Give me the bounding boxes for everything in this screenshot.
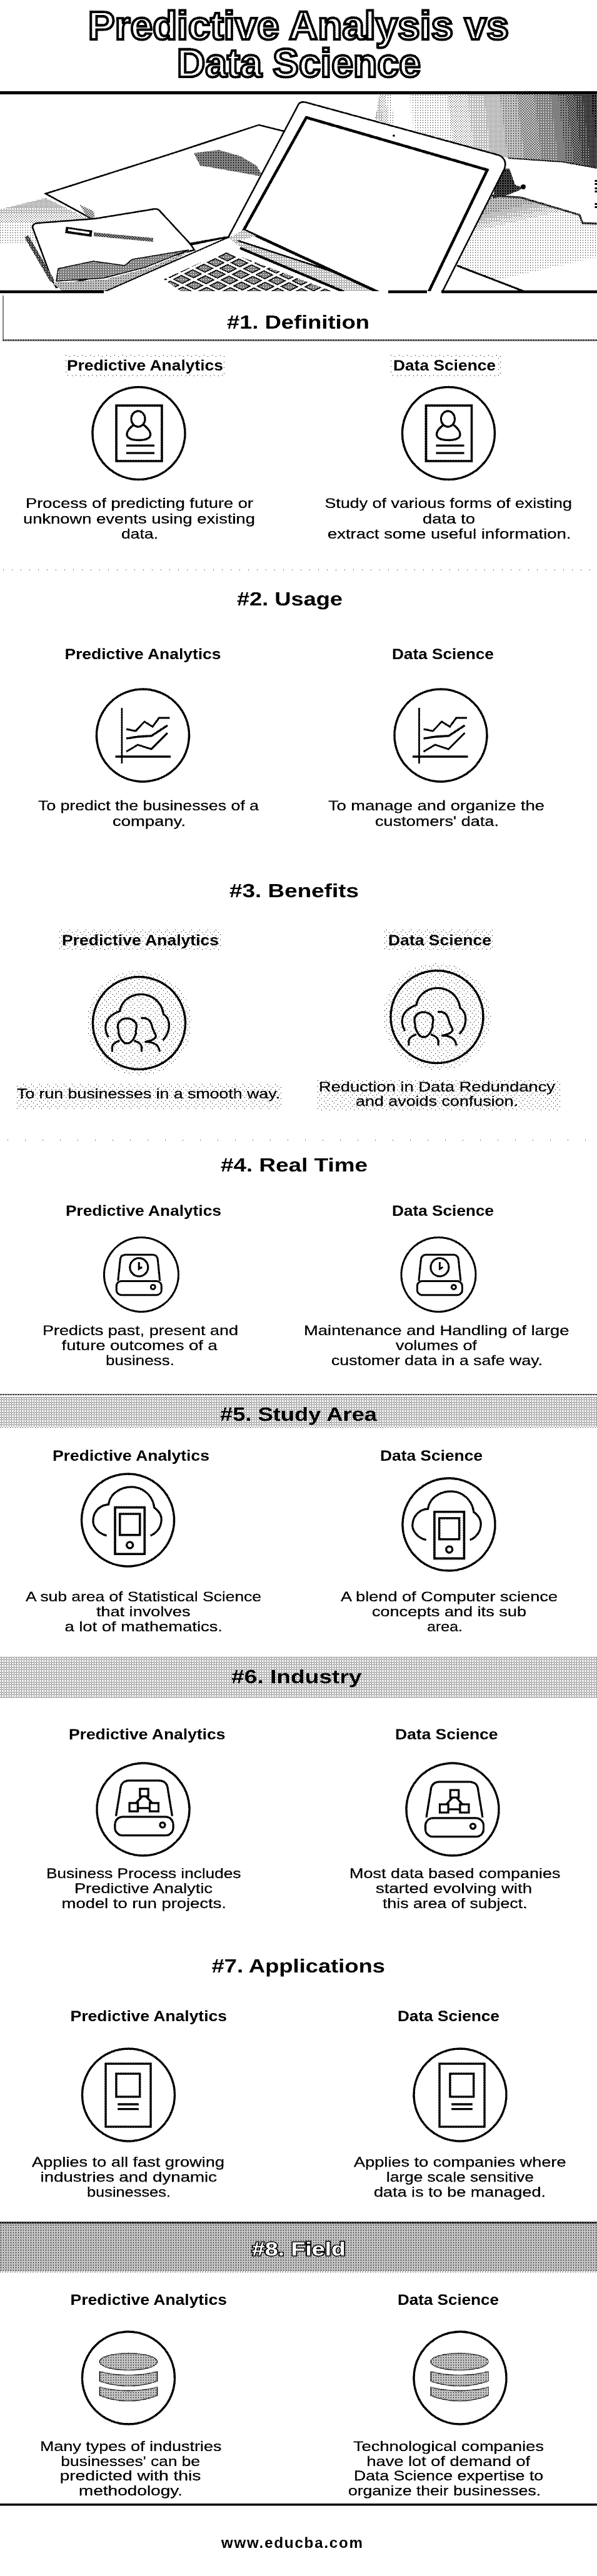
panel: #2 Usage (38, 588, 544, 829)
icon: drive with network left (97, 1763, 189, 1856)
text: predictive analytics field (40, 2439, 221, 2499)
icon: drive with clock left (104, 1237, 179, 1312)
text: data science benefits (319, 1079, 556, 1109)
title: Predictive Analysis vs (88, 3, 509, 48)
icon: line chart left (96, 689, 189, 782)
heading: Study Area: #5. Study Area (220, 1403, 378, 1425)
text: data science industry: Most data based companies (349, 1866, 560, 1881)
text: data science study area: area. (427, 1619, 463, 1634)
text: predictive analytics study area: a lot of mathematics. (65, 1619, 223, 1634)
text: data science field: Technological companies (353, 2439, 544, 2454)
title (88, 3, 509, 86)
text: predictive analytics field: Many types of industries (40, 2439, 221, 2454)
heading: Usage: #2. Usage (237, 588, 343, 610)
text: predictive analytics benefits: To run businesses in a smooth way. (17, 1086, 280, 1102)
text: predictive analytics study area: A sub area of Statistical Science (26, 1589, 261, 1604)
hero photo: laptop and notebook on a desk (0, 94, 597, 297)
text: data science definition: extract some useful information. (328, 526, 571, 542)
icon: tablet document left (83, 2049, 175, 2141)
icon: tablet document right (414, 2049, 506, 2141)
text: predictive analytics applications: industries and dynamic (41, 2169, 217, 2185)
panel: #8 Field (0, 2222, 597, 2499)
heading: Definition: #1. Definition (227, 311, 369, 333)
subheading: Data Science: Data Science (398, 2292, 499, 2309)
text: predictive analytics field: predicted with this (60, 2468, 201, 2484)
text: predictive analytics industry: Business Process includes (46, 1866, 241, 1881)
text: predictive analytics definition (23, 495, 255, 542)
text: predictive analytics real time: business. (106, 1353, 174, 1368)
subheading: Predictive Analytics: Predictive Analytics (62, 932, 219, 949)
icon: drive with clock right (401, 1237, 476, 1312)
subheading: Predictive Analytics: Predictive Analytics (53, 1448, 209, 1465)
text: data science industry: this area of subject. (383, 1896, 528, 1911)
heading: Applications: #7. Applications (212, 1955, 385, 1977)
icon: profile document right (403, 387, 495, 480)
text: data science study area: concepts and its sub (372, 1604, 526, 1619)
subheading: Predictive Analytics: Predictive Analytics (71, 2008, 227, 2025)
text: predictive analytics study area: that involves (96, 1604, 190, 1619)
text: predictive analytics definition: unknown events using existing (23, 511, 255, 527)
text: predictive analytics usage: company. (113, 813, 186, 829)
icon: phone in cloud left (82, 1474, 174, 1566)
text: data science usage: customers' data. (375, 813, 499, 829)
subheading: Predictive Analytics: Predictive Analytics (69, 1726, 225, 1743)
text: predictive analytics definition: Process of predicting future or (26, 495, 254, 511)
icon: database right (414, 2332, 506, 2424)
subheading: Data Science: Data Science (395, 1726, 498, 1743)
text: data science real time: customer data in a safe way. (331, 1353, 543, 1368)
icon: profile document left (93, 387, 185, 480)
text: data science study area: A blend of Computer science (341, 1589, 558, 1604)
subheading: Data Science: Data Science (380, 1448, 483, 1465)
subheading: Data Science: Data Science (392, 1203, 494, 1220)
text: predictive analytics applications (32, 2154, 224, 2200)
footer website: www.educba.com (221, 2535, 363, 2552)
subheading: Predictive Analytics: Predictive Analytics (67, 357, 223, 374)
text: data science field (348, 2439, 544, 2499)
text: data science study area (341, 1589, 558, 1634)
title: Data Science (177, 41, 421, 86)
panel: #4 Real Time (43, 1154, 569, 1368)
text: predictive analytics applications: Applies to all fast growing (32, 2154, 224, 2170)
text: data science real time (304, 1323, 569, 1368)
text: predictive analytics field: businesses' can be (61, 2454, 200, 2469)
text: data science field: have lot of demand of (366, 2454, 531, 2469)
text: data science benefits: Reduction in Data Redundancy (319, 1079, 556, 1095)
text: predictive analytics definition: data. (121, 526, 158, 542)
text: data science definition: Study of various forms of existing (325, 495, 572, 511)
text: predictive analytics applications: businesses. (87, 2184, 171, 2200)
heading: Field: #8. Field (252, 2238, 346, 2260)
panel: #5 Study Area (0, 1394, 597, 1634)
text: data science definition: data to (423, 511, 475, 527)
text: data science usage: To manage and organize the (328, 798, 544, 813)
text: predictive analytics real time (43, 1323, 238, 1368)
text: data science applications: large scale sensitive (386, 2169, 534, 2185)
text: predictive analytics usage: To predict the businesses of a (38, 798, 259, 813)
panel: #6 Industry (0, 1657, 597, 1911)
text: data science industry (349, 1866, 560, 1911)
panel: #1 Definition (3, 296, 597, 542)
subheading: Predictive Analytics: Predictive Analytics (66, 1203, 221, 1220)
text: data science benefits: and avoids confusion. (356, 1093, 518, 1109)
text: data science definition (325, 495, 572, 542)
text: predictive analytics study area (26, 1589, 261, 1634)
panel: #3 Benefits (16, 880, 560, 1111)
text: data science field: organize their businesses. (348, 2483, 541, 2499)
subheading: Data Science: Data Science (392, 646, 494, 663)
subheading: Data Science: Data Science (388, 932, 491, 949)
text: data science applications (354, 2154, 566, 2200)
text: data science real time: volumes of (396, 1338, 478, 1353)
subheading: Data Science: Data Science (398, 2008, 499, 2025)
heading: Benefits: #3. Benefits (229, 880, 359, 902)
heading: Industry: #6. Industry (231, 1666, 362, 1688)
text: data science industry: started evolving with (376, 1881, 532, 1896)
text: data science applications: Applies to companies where (354, 2154, 566, 2170)
text: data science real time: Maintenance and Handling of large (304, 1323, 569, 1338)
text: predictive analytics industry: Predictive Analytic (74, 1881, 213, 1896)
text: data science usage (328, 798, 544, 829)
text: predictive analytics industry: model to run projects. (62, 1896, 226, 1911)
icon: database left (83, 2332, 175, 2424)
subheading: Predictive Analytics: Predictive Analytics (65, 646, 221, 663)
text: predictive analytics real time: Predicts past, present and (43, 1323, 238, 1338)
icon: phone in cloud right (403, 1478, 495, 1571)
icon: drive with network right (406, 1763, 499, 1856)
text: predictive analytics real time: future outcomes of a (62, 1338, 218, 1353)
text: data science field: Data Science expertise to (354, 2468, 543, 2484)
heading: Real Time: #4. Real Time (221, 1154, 368, 1176)
text: predictive analytics industry (46, 1866, 241, 1911)
text: predictive analytics usage (38, 798, 259, 829)
subheading: Predictive Analytics: Predictive Analytics (71, 2292, 227, 2309)
text: predictive analytics field: methodology. (79, 2483, 183, 2499)
icon: line chart right (394, 689, 487, 782)
panel: #7 Applications (32, 1955, 566, 2200)
subheading: Data Science: Data Science (393, 357, 496, 374)
icon: people in cloud left (86, 971, 191, 1076)
text: data science applications: data is to be managed. (374, 2184, 546, 2200)
icon: people in cloud right (383, 963, 491, 1071)
